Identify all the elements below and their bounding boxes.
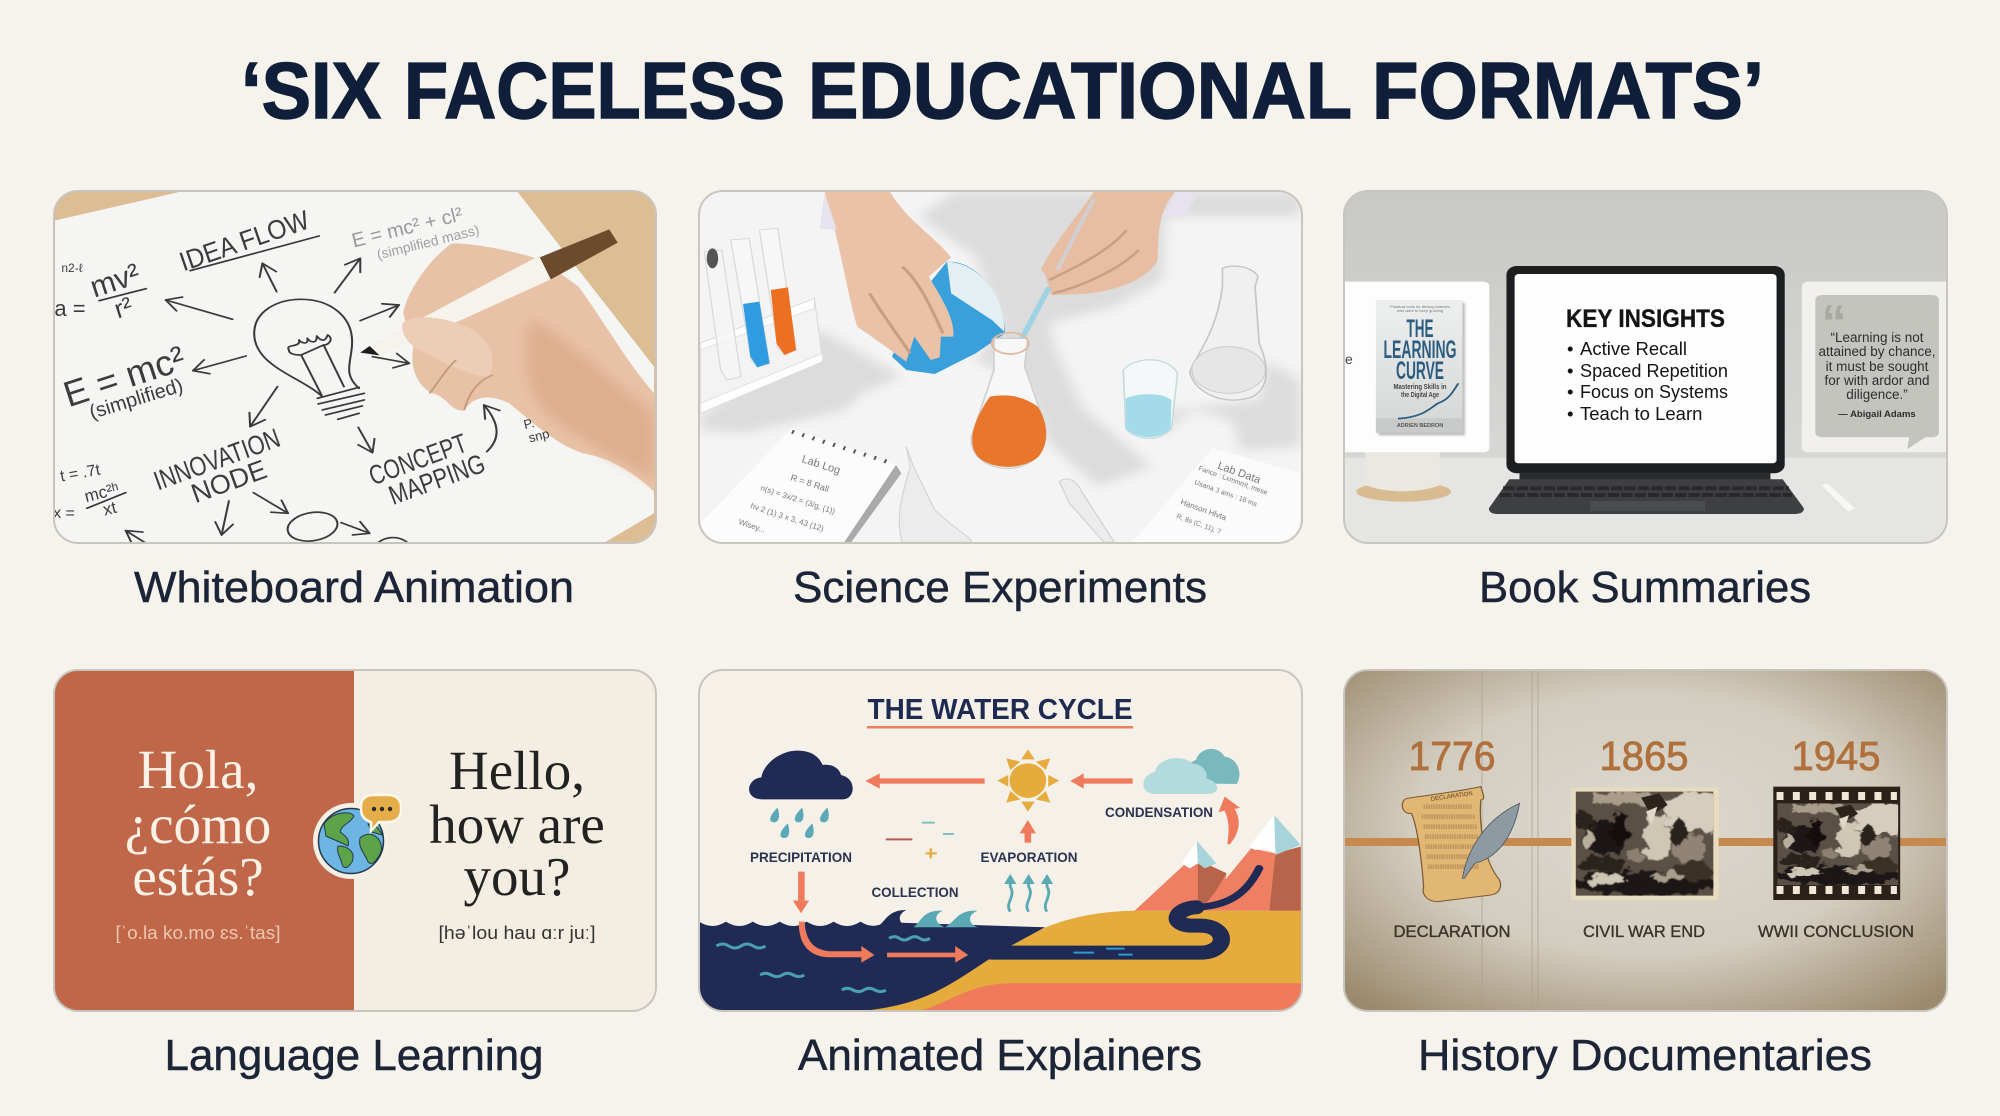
river: [992, 868, 1259, 953]
caption: animated explainers: Animated Explainers: [798, 1031, 1202, 1080]
tablet: [1506, 266, 1785, 473]
lower coral layer: [916, 983, 1302, 1012]
handwritten notes: R = 8 Rall: [789, 472, 830, 494]
sketch labels: snp: [527, 426, 551, 445]
caption: book summaries: Book Summaries: [1479, 563, 1811, 612]
quote text: — Abigail Adams: [1838, 409, 1916, 420]
event labels: CIVIL WAR END: [1583, 922, 1705, 941]
water cycle labels: CONDENSATION: [1105, 804, 1213, 820]
spanish half: estás?: [132, 846, 264, 907]
years: 1945: [1792, 733, 1880, 779]
precipitation cloud: [749, 751, 853, 799]
sketch labels: (simplified mass): [375, 222, 481, 262]
caption: whiteboard animation: Whiteboard Animation: [134, 563, 574, 612]
sketch labels: [53, 204, 551, 522]
panel border: [699, 191, 1302, 543]
rain drops: [770, 808, 829, 838]
stylus: [1821, 483, 1855, 512]
tablet text: key insights: •: [1567, 338, 1573, 359]
sketch labels: t = .7t: [59, 462, 102, 485]
book text: ADRIEN BEDRON: [1397, 423, 1443, 429]
test tubes: [704, 228, 796, 380]
panel: science experiments: [699, 191, 1302, 543]
notebook: [783, 428, 902, 542]
tablet text: key insights: KEY INSIGHTS: [1566, 305, 1725, 333]
desk scene: [1340, 266, 1965, 514]
book text: the Digital Age: [1401, 390, 1439, 399]
handwritten notes: n(s) = 3x/2 = (3/g, (1)): [759, 483, 836, 516]
tablet text: key insights: Focus on Systems: [1580, 381, 1728, 402]
timeline bar: [1344, 838, 1947, 846]
handwritten notes: Usana 3 ams : 18 ms: [1193, 479, 1258, 509]
mountains: [1135, 815, 1301, 911]
lab coat sleeves: [820, 192, 1198, 230]
handwritten notes: Lab Data: [1216, 460, 1263, 487]
timeline artwork: [1402, 782, 1910, 905]
handwritten notes: [737, 453, 1269, 536]
spanish half: [ˈo.la ko.mo ɛs.ˈtas]: [116, 923, 280, 943]
scroll with quill: [1402, 787, 1520, 902]
clear flask: [1190, 266, 1266, 400]
small dashes: [886, 823, 954, 858]
cut-off card text: e: [1345, 351, 1353, 367]
caption: language learning: Language Learning: [164, 1031, 544, 1080]
sketch labels: INNOVATION: [150, 423, 284, 496]
sketch labels: n2-ℓ: [61, 261, 83, 275]
handwritten notes: Lab Log: [800, 453, 842, 477]
water cycle labels: EVAPORATION: [980, 849, 1078, 865]
water cycle labels: PRECIPITATION: [750, 849, 852, 865]
title: EDUCATIONAL: [808, 46, 1352, 135]
book text: [1384, 304, 1456, 429]
sketch labels: MAPPING: [385, 448, 489, 511]
sketch labels: xt: [101, 498, 119, 519]
tablet text: key insights: Teach to Learn: [1580, 403, 1702, 424]
handwritten notes: Hanson Hlvta: [1179, 497, 1228, 522]
doodle arrows: [87, 236, 497, 545]
sketch labels: a =: [54, 296, 86, 321]
cast shadows: [700, 192, 1300, 487]
event labels: [1394, 922, 1914, 941]
sketch labels: E = mc² + cl²: [350, 204, 465, 252]
left hand: [825, 192, 953, 362]
panel border: [1344, 191, 1947, 543]
waves: [876, 910, 978, 927]
years: 1776: [1408, 733, 1496, 779]
english half: [həˈlou hau ɑːr juː]: [438, 923, 596, 943]
sketch labels: x =: [53, 505, 75, 522]
lab data sheet: [1133, 448, 1300, 542]
event labels: WWII CONCLUSION: [1758, 922, 1914, 941]
handwritten notes: Wisey...: [737, 517, 767, 535]
years: 1865: [1600, 733, 1688, 779]
sketch labels: E = mc²: [58, 337, 190, 415]
caption: history documentaries: History Documentaries: [1418, 1031, 1872, 1080]
sketch labels: NODE: [187, 454, 271, 509]
tablet text: key insights: [1566, 305, 1728, 424]
panel: language learning: [54, 670, 656, 1011]
scroll heading: DECLARATION: [1431, 791, 1473, 803]
tablet text: key insights: Spaced Repetition: [1580, 360, 1728, 381]
paper folds: [1482, 670, 1538, 1011]
title: FACELESS: [404, 46, 785, 135]
marker pen: [424, 258, 551, 322]
left card: [1340, 282, 1489, 452]
english half: [429, 740, 605, 943]
panel: whiteboard animation: [53, 191, 656, 545]
test tube rack: [700, 298, 823, 413]
panel: history documentaries: [1344, 670, 1947, 1011]
thumb: [402, 317, 493, 377]
quote text: “: [1822, 295, 1846, 351]
tablet text: key insights: •: [1567, 360, 1573, 381]
handwritten notes: Fance : Lxmmmt, mese: [1197, 465, 1269, 497]
evaporation squiggles: [1009, 882, 1049, 912]
hand: [403, 243, 654, 492]
small glass: [899, 447, 972, 542]
english half: you?: [464, 846, 570, 907]
event labels: DECLARATION: [1394, 922, 1510, 941]
spanish half: ¿cómo: [125, 794, 271, 855]
title: ‘SIX: [241, 46, 381, 135]
sketch page artwork: [54, 192, 654, 545]
sketch labels: CONCEPT: [365, 428, 471, 491]
handwritten notes: R, 8s (C, 11), 7: [1175, 513, 1222, 536]
quote text: it must be sought: [1826, 359, 1929, 374]
book text: Practical tools for lifelong learners: [1390, 304, 1450, 309]
caption: science experiments: Science Experiments: [793, 563, 1207, 612]
water cycle diagram: [699, 749, 1302, 1012]
photo: civil war: [1564, 782, 1727, 905]
english half: Hello,: [449, 740, 585, 801]
quote text: for with ardor and: [1824, 373, 1930, 388]
cyan beaker: [1123, 360, 1178, 438]
process arrows: [793, 773, 1238, 963]
pipette: [1059, 479, 1114, 542]
light bulb: [254, 299, 364, 419]
quote text: diligence.”: [1846, 387, 1908, 402]
stirring rod: [1019, 286, 1052, 338]
book text: THE: [1406, 315, 1434, 343]
tablet text: key insights: Active Recall: [1580, 338, 1687, 359]
mug and coaster: [1356, 447, 1451, 502]
book text: LEARNING: [1384, 336, 1456, 364]
quote text: [1818, 295, 1936, 420]
spanish half: [54, 670, 354, 1011]
right card: [1802, 282, 1946, 452]
sketch labels: (simplified): [87, 375, 186, 424]
river glints: [1074, 949, 1133, 955]
book text: who want to keep growing: [1397, 308, 1443, 313]
blue beaker: [892, 262, 1005, 374]
sketch labels: P.: [522, 415, 536, 432]
film frame: WWII: [1767, 787, 1910, 900]
title: FORMATS’: [1372, 46, 1764, 135]
sketch labels: mc²ʰ: [82, 479, 121, 506]
ocean: [699, 922, 1045, 1012]
panel border: [1344, 670, 1947, 1011]
sketch labels: r²: [110, 290, 136, 324]
panel border: [54, 670, 656, 1011]
panel border: [699, 670, 1302, 1011]
book cover: [1376, 300, 1465, 435]
panel: animated explainers: [699, 670, 1302, 1012]
water cycle labels: [750, 804, 1213, 900]
condensation clouds: [1143, 749, 1239, 794]
keyboard: [1489, 473, 1804, 514]
panel border: [54, 191, 656, 543]
land layer: [853, 911, 1302, 1012]
quote text: attained by chance,: [1818, 344, 1936, 359]
title: [241, 46, 1764, 135]
sketch labels: mv²: [86, 258, 144, 304]
ripples: [717, 937, 930, 992]
sketch labels: IDEA FLOW: [176, 205, 313, 277]
quote bubble: [1815, 295, 1939, 449]
icon: globe with speech bubble: [313, 795, 401, 879]
book text: CURVE: [1396, 357, 1444, 385]
tablet text: key insights: •: [1567, 381, 1573, 402]
water cycle title: THE WATER CYCLE: [868, 694, 1132, 726]
spanish half: Hola,: [138, 739, 258, 800]
lab scene: [700, 192, 1300, 542]
sun: [997, 749, 1059, 812]
panel: book summaries: [1340, 191, 1965, 543]
book text: Mastering Skills in: [1394, 382, 1447, 391]
years: [1408, 733, 1880, 779]
quote text: “Learning is not: [1830, 330, 1924, 345]
orange flask: [971, 333, 1046, 468]
paper sheet: [54, 192, 654, 542]
water cycle labels: COLLECTION: [872, 884, 958, 900]
tablet text: key insights: •: [1567, 403, 1573, 424]
handwritten notes: hv 2 (1) 3 x 3, 43 (12): [749, 501, 825, 534]
right hand: [1041, 192, 1176, 295]
english half: how are: [429, 794, 605, 855]
